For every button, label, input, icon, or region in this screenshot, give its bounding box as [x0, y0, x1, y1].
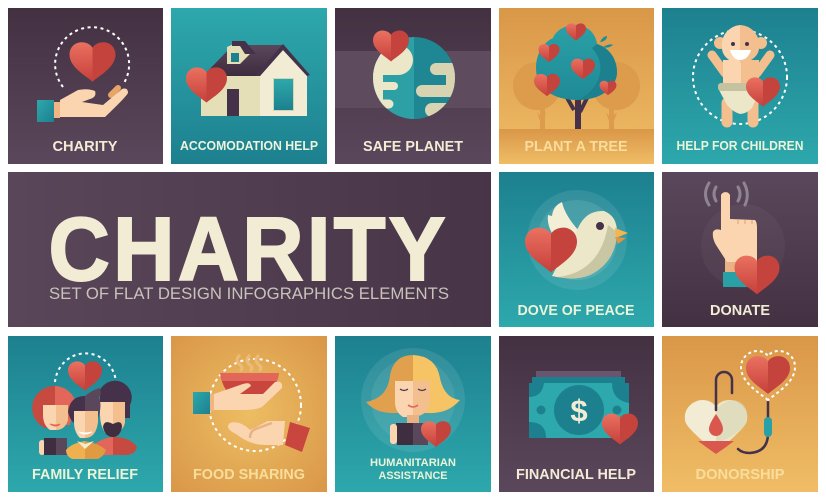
label: ASSISTANCE	[378, 470, 448, 482]
panel: financial help	[499, 336, 654, 492]
icon: steam	[237, 355, 261, 371]
icon: heart	[746, 356, 790, 394]
icon: receiving hand	[228, 421, 310, 452]
icon: heart	[186, 67, 227, 103]
panel: plant a tree	[499, 8, 654, 164]
ground	[499, 129, 654, 164]
icon: heart	[68, 361, 102, 391]
panel: accommodation help	[171, 8, 327, 164]
icon: banknotes: $	[570, 393, 588, 428]
label: ACCOMODATION HELP	[180, 138, 318, 153]
background trees	[513, 62, 640, 129]
icon: banknotes	[529, 371, 629, 438]
dashed circle	[55, 27, 129, 87]
icon: heart	[373, 31, 409, 61]
panel: donate	[662, 172, 818, 327]
icon: dove	[548, 202, 628, 279]
tree	[536, 25, 617, 129]
icon: heart	[70, 42, 116, 82]
label: FAMILY RELIEF	[32, 466, 138, 483]
icon: heart	[525, 228, 577, 272]
title: CHARITY	[48, 199, 446, 300]
label	[370, 457, 456, 482]
label: PLANT A TREE	[524, 138, 628, 155]
label: HELP FOR CHILDREN	[676, 138, 804, 153]
panel: food sharing	[171, 336, 327, 492]
panel: safe planet	[335, 8, 491, 164]
icon: heart	[734, 256, 780, 294]
icon: open hand	[37, 88, 128, 122]
label: HUMANITARIAN	[370, 457, 456, 469]
label: FINANCIAL HELP	[516, 466, 636, 483]
icon: giving hand	[193, 382, 282, 414]
icon: heart	[602, 414, 638, 444]
panel: charity	[8, 8, 163, 164]
icon: signal waves	[706, 183, 747, 205]
icon: pointing hand	[713, 192, 757, 287]
panel: main title	[8, 172, 491, 327]
label: DONATE	[710, 302, 770, 319]
panel: dove of peace	[499, 172, 654, 327]
icon: family	[32, 381, 137, 459]
icon: heart	[421, 421, 451, 447]
label: DOVE OF PEACE	[518, 302, 634, 319]
icon: big heart with drop	[685, 400, 747, 454]
icon: house	[201, 41, 310, 116]
icon: heart	[746, 77, 780, 107]
label: FOOD SHARING	[193, 466, 305, 483]
icon: dashed heart	[741, 351, 795, 400]
panel: help for children	[662, 8, 818, 164]
subtitle: SET OF FLAT DESIGN INFOGRAPHICS ELEMENTS	[49, 284, 449, 303]
icon: baby	[712, 25, 770, 122]
icon: woman	[366, 355, 460, 445]
label: DONORSHIP	[696, 466, 784, 483]
icon: bowl	[220, 373, 279, 397]
label: CHARITY	[52, 138, 118, 155]
panel: family relief	[8, 336, 163, 492]
hearts on tree	[534, 23, 616, 96]
panel: humanitarian assistance	[335, 336, 491, 492]
panel: donorship	[662, 336, 818, 492]
icon: globe	[368, 37, 458, 119]
icon: tube	[716, 372, 772, 453]
label: SAFE PLANET	[363, 138, 463, 155]
